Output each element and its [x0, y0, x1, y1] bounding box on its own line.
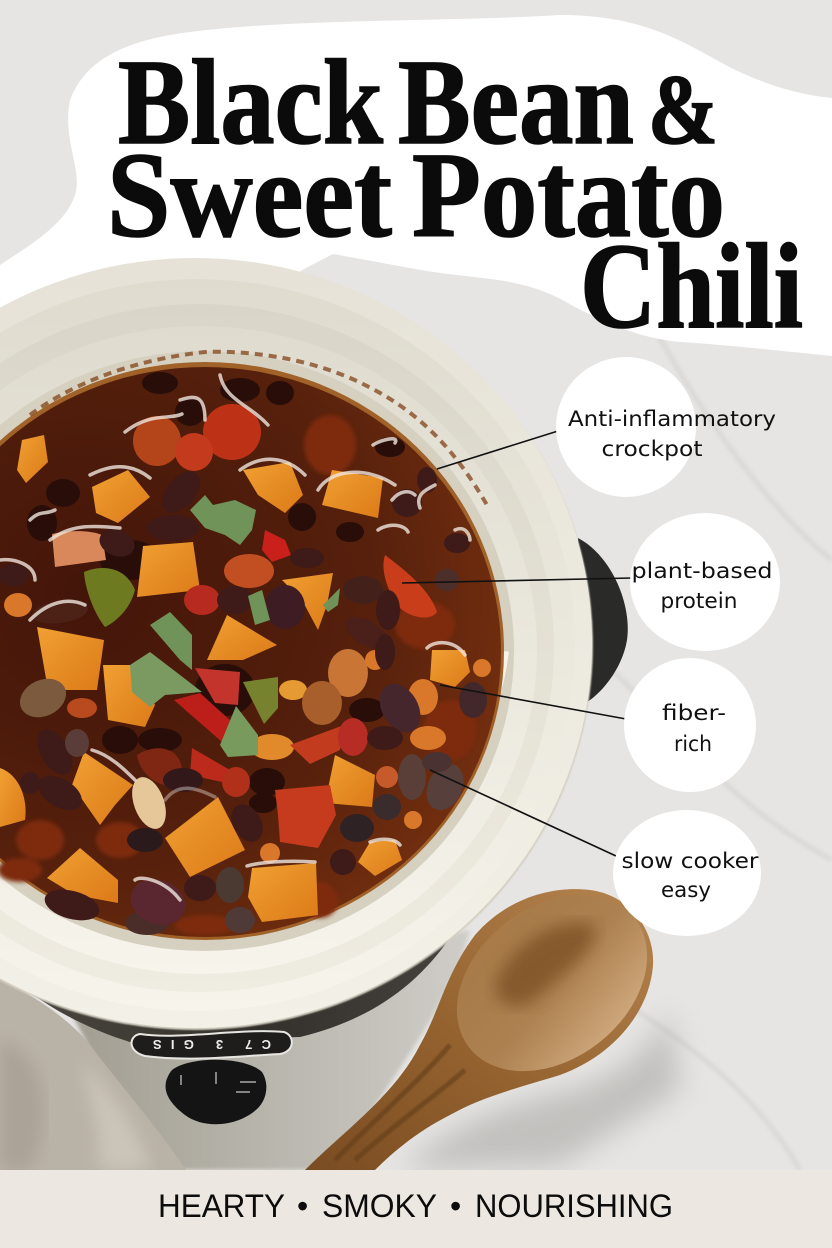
- white title panel: [0, 15, 832, 420]
- tomatoes and red peppers: [137, 404, 437, 848]
- callout: plant-based protein: protein: [660, 589, 738, 614]
- glossy highlights: [0, 375, 470, 900]
- title line 1: &: [648, 54, 718, 165]
- callout: plant-based protein: plant-based: [632, 559, 772, 584]
- callout: slow cooker easy: easy: [661, 878, 711, 903]
- callout: fiber-rich: fiber-: [662, 701, 726, 726]
- control panel: [132, 1031, 292, 1059]
- callout: fiber-rich: [440, 658, 756, 792]
- footer tagline: •: [450, 1188, 461, 1224]
- callout: anti-inflammatory crockpot: [437, 357, 776, 497]
- icon: wooden spoon: [305, 858, 682, 1170]
- callout: anti-inflammatory crockpot: Anti-inflammatory: [568, 407, 776, 432]
- title line 2: Potato: [412, 128, 725, 263]
- callout: slow cooker easy: slow cooker: [622, 849, 759, 874]
- crock inner rim splatter: [30, 352, 487, 505]
- reddish sauce patches: [0, 415, 476, 935]
- green peppers: [84, 568, 278, 724]
- callout: fiber-rich: rich: [674, 732, 712, 757]
- callout: slow cooker easy: [430, 770, 761, 936]
- towel: [0, 978, 186, 1170]
- callout: plant-based protein: [402, 513, 780, 651]
- slow cooker dark body band: [10, 900, 455, 1042]
- cilantro leaves: [130, 495, 340, 757]
- footer tagline: NOURISHING: [475, 1188, 673, 1224]
- control knob: [166, 1060, 266, 1124]
- callout: anti-inflammatory crockpot: crockpot: [602, 437, 702, 462]
- footer tagline: HEARTY: [158, 1188, 285, 1224]
- footer tagline: SMOKY: [322, 1188, 437, 1224]
- white bean: [126, 772, 172, 834]
- title line 2: [107, 128, 725, 263]
- small orange pieces: [4, 416, 491, 863]
- shadow on marble below the pot: [70, 930, 470, 1170]
- title line 1: Black: [118, 35, 383, 170]
- sweet potato cubes: [0, 435, 470, 922]
- footer tagline: [158, 1188, 673, 1224]
- crock rim: [0, 258, 593, 1030]
- chili surface: [0, 362, 504, 940]
- title line 3: Chili: [580, 219, 803, 354]
- kidney and black beans: [0, 465, 487, 935]
- dark beans in the broth, upper area: [27, 372, 405, 813]
- slow cooker side handle: [578, 538, 628, 704]
- title: [107, 35, 803, 354]
- footer band: [0, 1170, 832, 1248]
- control panel: C7 3 GIS: [153, 1037, 271, 1052]
- footer tagline: •: [297, 1188, 308, 1224]
- title line 2: Sweet: [107, 128, 392, 263]
- title line 1: Bean: [398, 35, 634, 170]
- title line 1: [118, 35, 718, 170]
